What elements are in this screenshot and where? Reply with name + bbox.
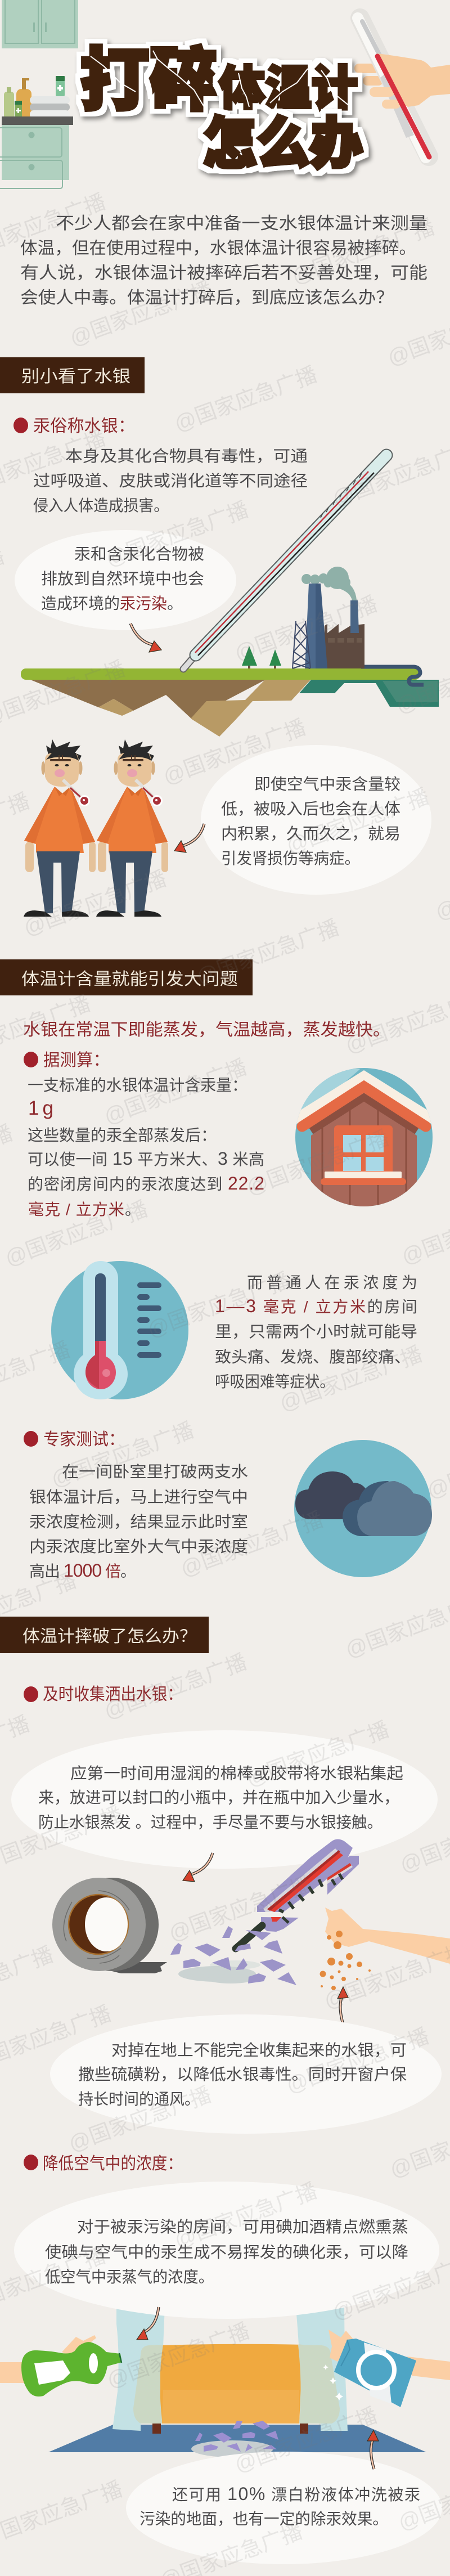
- illustration: factory: [292, 567, 364, 668]
- text block: expert test: 高出 1000 倍。: [29, 1560, 136, 1581]
- callout: iodine: 低空气中汞蒸气的浓度。: [45, 2268, 214, 2286]
- illustration: trees: [242, 646, 281, 668]
- text block: symptoms: 里，只需两个小时就可能导: [215, 1323, 417, 1340]
- text block: symptoms: 呼吸困难等症状。: [215, 1373, 335, 1390]
- watermarks: @国家应急广播: [101, 1650, 250, 1724]
- text block: introduction: 有人说，水银体温计被摔碎后若不妥善处理，可能: [20, 264, 428, 282]
- bullet heading: expert test: 专家测试：: [43, 1430, 125, 1449]
- bullet heading: 汞俗称水银：: [33, 417, 135, 436]
- text block: symptoms: 而普通人在汞浓度为: [247, 1274, 417, 1291]
- heading: section 1: 别小看了水银: [21, 367, 130, 386]
- icon: lower cabinet: [0, 116, 73, 189]
- watermarks: @国家应急广播: [166, 1873, 315, 1946]
- text block: introduction: 会使人中毒。体温计打碎后，到底应该怎么办？: [20, 289, 394, 307]
- watermarks: @国家应急广播: [21, 867, 170, 940]
- watermarks: @国家应急广播: [178, 1508, 327, 1581]
- bullet heading: reduce: 降低空气中的浓度：: [43, 2155, 183, 2173]
- illustration: sulfur dots: [320, 1931, 371, 1990]
- text block: calculation: 可以使一间 15 平方米大、3 米高: [28, 1148, 264, 1169]
- watermarks: @国家应急广播: [232, 2404, 381, 2477]
- icon: house: [295, 1068, 433, 1206]
- callout: bioaccumulation: 内积累，久而久之，就易: [221, 825, 400, 842]
- callout: bioaccumulation: 低，被吸入后也会在人体: [221, 800, 400, 818]
- arrow: to tape: [183, 1853, 213, 1882]
- arrow: to curtain: [137, 2307, 159, 2340]
- text block: introduction: 不少人都会在家中准备一支水银体温计来测量: [56, 214, 428, 233]
- watermarks: @国家应急广播: [284, 2025, 433, 2098]
- text block: expert test: 内汞浓度比室外大气中汞浓度: [29, 1538, 248, 1555]
- text block: calculation: 的密闭房间内的汞浓度达到 22.2: [28, 1173, 264, 1193]
- watermarks: @国家应急广播: [172, 2179, 321, 2252]
- text block: symptoms: [215, 1274, 417, 1390]
- text block: calculation: 这些数量的汞全部蒸发后：: [28, 1127, 217, 1144]
- watermarks: @国家应急广播: [277, 1343, 426, 1416]
- text block: expert test: 汞浓度检测，结果显示此时室: [29, 1513, 248, 1531]
- panel: evaporation: [23, 1021, 441, 1581]
- text block: calculation: [28, 1076, 264, 1218]
- callout: sulfur: 持长时间的通风。: [78, 2090, 200, 2108]
- illustration: thermometer: [183, 455, 386, 669]
- icon: hand holding thermometer: [354, 18, 450, 158]
- callout: bioaccumulation: [201, 745, 431, 895]
- illustration: glass shards: [170, 1926, 296, 1985]
- text block: calculation: 一支标准的水银体温计含汞量：: [28, 1076, 248, 1094]
- panel: mercury: [14, 417, 439, 737]
- callout: bleach: 还可用 10% 漂白粉液体冲洗被汞: [172, 2484, 420, 2504]
- text block: expert test: 在一间卧室里打破两支水: [62, 1463, 248, 1480]
- illustration: person one: [24, 739, 96, 917]
- callout: iodine: [14, 2182, 439, 2319]
- callout: bioaccumulation: 即使空气中汞含量较: [254, 775, 400, 793]
- illustration: person two: [96, 739, 168, 917]
- panel: collect mercury: [11, 1685, 450, 2134]
- heading: section 2: [0, 959, 253, 995]
- watermarks: @国家应急广播: [160, 716, 309, 789]
- panel: header illustration: [0, 0, 450, 189]
- callout: pollution: 造成环境的汞污染。: [41, 595, 183, 612]
- watermarks: @国家应急广播: [67, 277, 216, 351]
- watermarks: @国家应急广播: [244, 1718, 393, 1791]
- callout: sulfur: [50, 2014, 442, 2134]
- watermarks: @国家应急广播: [284, 785, 433, 858]
- text block: introduction: [20, 214, 428, 307]
- illustration: mercury puddle: [178, 1960, 260, 1983]
- heading: section 3: [0, 1617, 209, 1653]
- icon: bottles and towels: [4, 76, 70, 119]
- text block: symptoms: 1—3 毫克 / 立方米的房间: [215, 1296, 417, 1316]
- arrow: from callout to dots: [338, 1987, 348, 2026]
- icon: hand with green bottle: [0, 2335, 122, 2397]
- text block: expert test: 银体温计后，马上进行空气中: [29, 1488, 248, 1506]
- watermarks: @国家应急广播: [145, 1269, 294, 1342]
- callout: bleach: 污染的地面，也有一定的除汞效果。: [140, 2510, 388, 2528]
- callout: collect instructions: [11, 1730, 438, 1869]
- icon: hand: [325, 1908, 450, 1964]
- watermarks: @国家应急广播: [172, 363, 321, 436]
- text block: toxicity: 侵入人体造成损害。: [33, 497, 169, 514]
- arrow: to ground: [130, 623, 161, 652]
- icon: sparkles: [323, 2364, 343, 2400]
- icon: clouds: [294, 1440, 432, 1577]
- text block: toxicity: 过呼吸道、皮肤或消化道等不同途径: [33, 472, 308, 490]
- watermarks: @国家应急广播: [194, 916, 343, 989]
- heading: section 3: 体温计摔破了怎么办？: [22, 1627, 197, 1646]
- callout: collect instructions: 防止水银蒸发 。过程中，手尽量不要与水银接触。: [38, 1814, 382, 1831]
- watermarks: @国家应急广播: [66, 2083, 215, 2156]
- icon: thermometer badge: [51, 1261, 188, 1399]
- text block: toxicity: [33, 447, 308, 514]
- illustration: rug shards and puddle: [191, 2421, 278, 2457]
- bullet heading: calculation: 据测算：: [43, 1051, 110, 1070]
- icon: hand with blue box: [328, 2330, 450, 2407]
- watermarks: @国家应急广播: [48, 1419, 197, 1492]
- text block: toxicity: 本身及其化合物具有毒性，可通: [65, 447, 308, 465]
- red statement: 水银在常温下即能蒸发，气温越高，蒸发越快。: [23, 1021, 390, 1039]
- watermarks: @国家应急广播: [232, 593, 381, 666]
- panel: body accumulation: [24, 739, 431, 917]
- illustration: floating island: [21, 667, 439, 737]
- callout: sulfur: 撒些硫磺粉，以降低水银毒性。同时开窗户保: [78, 2066, 407, 2083]
- callout: collect instructions: 应第一时间用湿润的棉棒或胶带将水银粘集起: [70, 1765, 403, 1782]
- watermarks: @国家应急广播: [289, 216, 438, 289]
- watermarks: @国家应急广播: [104, 2319, 253, 2393]
- title line: 体温计: 体温计: [219, 62, 358, 115]
- icon: tape roll: [52, 1878, 167, 1973]
- illustration: room with sofa: [48, 2307, 426, 2452]
- callout: pollution: 排放到自然环境中也会: [41, 570, 204, 587]
- icon: broken thermometer: [236, 1839, 359, 1949]
- callout: iodine: 对于被汞污染的房间，可用碘加酒精点燃熏蒸: [77, 2218, 408, 2236]
- heading: section 2: 体温计含量就能引发大问题: [21, 970, 238, 989]
- text block: symptoms: 致头痛、发烧、腹部绞痛、: [215, 1348, 411, 1366]
- watermarks: @国家应急广播: [101, 1056, 250, 1129]
- title line: 打碎: 打碎: [80, 42, 219, 119]
- arrow: to rug: [367, 2430, 379, 2469]
- text block: calculation: 1 g: [28, 1097, 53, 1119]
- text block: expert test: [29, 1463, 248, 1581]
- panel: reduce concentration: [0, 2155, 450, 2564]
- title: [80, 42, 363, 176]
- callout: sulfur: 对掉在地上不能完全收集起来的水银，可: [111, 2041, 407, 2059]
- callout: bioaccumulation: 引发肾损伤等病症。: [221, 850, 360, 867]
- arrow: to people: [174, 824, 204, 852]
- callout: pollution: [15, 530, 236, 630]
- title line: 怎么办: 怎么办: [203, 113, 363, 176]
- bullet heading: collect: 及时收集洒出水银：: [43, 1685, 183, 1704]
- callout: iodine: 使碘与空气中的汞生成不易挥发的碘化汞，可以降: [45, 2243, 408, 2261]
- title cracks: [91, 51, 349, 107]
- heading: section 1: [0, 357, 145, 393]
- callout: pollution: 汞和含汞化合物被: [74, 545, 204, 563]
- watermarks: @国家应急广播: [103, 498, 252, 571]
- callout: bleach: [126, 2452, 442, 2564]
- callout: collect instructions: 来，放进可以封口的小瓶中，并在瓶中加入少量水，: [38, 1789, 399, 1806]
- icon: upper cabinet: [2, 0, 78, 48]
- text block: calculation: 毫克 / 立方米。: [28, 1201, 141, 1218]
- text block: introduction: 体温，但在使用过程中，水银体温计很容易被摔碎。: [20, 239, 416, 258]
- watermarks: @国家应急广播: [2, 1197, 151, 1271]
- watermarks: @国家应急广播: [244, 1127, 393, 1200]
